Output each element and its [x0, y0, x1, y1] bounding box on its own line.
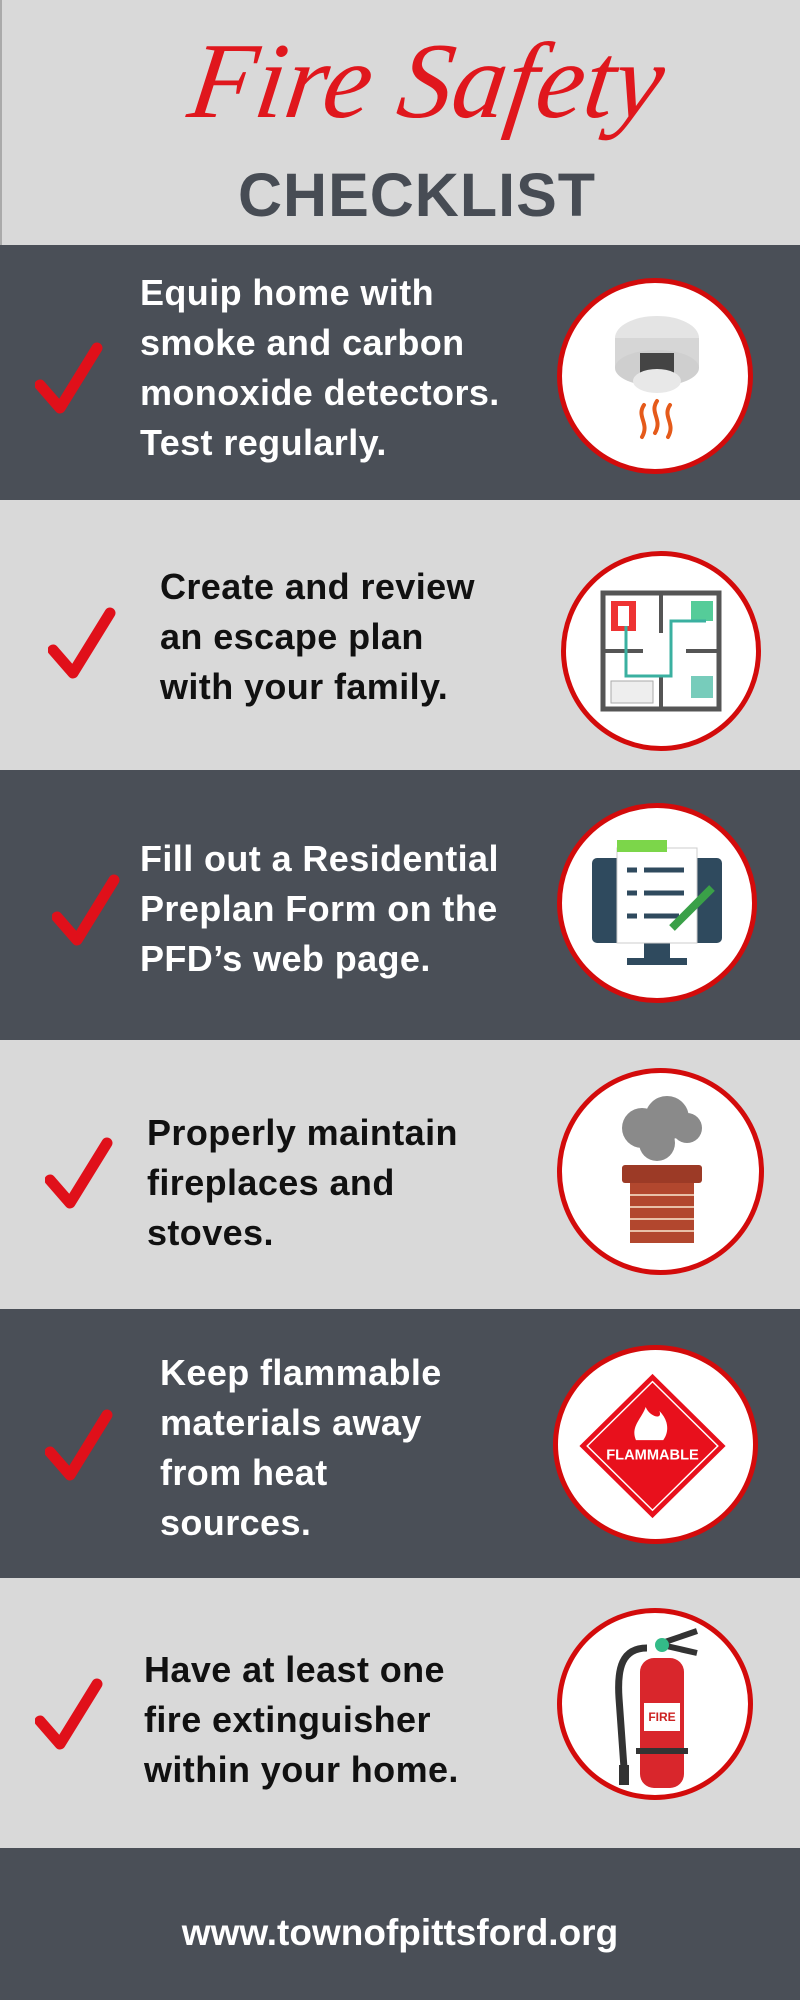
- check icon: [52, 874, 120, 946]
- icon: flammable sign: FLAMMABLE: [606, 1448, 699, 1464]
- row 3: [0, 770, 800, 1040]
- subtitle: CHECKLIST: CHECKLIST: [238, 161, 596, 229]
- row 2: [0, 500, 800, 770]
- footer url: www.townofpittsford.org: [182, 1912, 618, 1953]
- text: detectors: Equip home with: [140, 272, 434, 313]
- text: flammables: sources.: [160, 1502, 311, 1543]
- title: Fire Safety: Fire Safety: [182, 22, 672, 141]
- text: detectors: [140, 272, 500, 463]
- text: fireplaces: Properly maintain: [147, 1112, 458, 1153]
- text: flammables: [160, 1352, 442, 1543]
- text: flammables: materials away: [160, 1402, 422, 1443]
- text: extinguisher: fire extinguisher: [144, 1699, 431, 1740]
- icon: floor plan: [561, 551, 761, 751]
- check icon: [35, 1678, 102, 1750]
- row 4: [0, 1040, 800, 1309]
- icon: smoke detector: [557, 278, 753, 474]
- text: escape plan: an escape plan: [160, 616, 424, 657]
- icon: computer form: [557, 803, 757, 1003]
- icon: extinguisher: FIRE: [648, 1710, 676, 1724]
- check icon: [35, 342, 102, 414]
- header: [0, 0, 800, 245]
- text: escape plan: with your family.: [160, 666, 448, 707]
- text: preplan form: Fill out a Residential: [140, 838, 499, 879]
- text: detectors: Test regularly.: [140, 422, 387, 463]
- icon: extinguisher: [557, 1608, 753, 1800]
- row 5: [0, 1309, 800, 1578]
- text: preplan form: Preplan Form on the: [140, 888, 498, 929]
- text: fireplaces: stoves.: [147, 1212, 274, 1253]
- text: flammables: from heat: [160, 1452, 328, 1493]
- text: extinguisher: Have at least one: [144, 1649, 445, 1690]
- text: fireplaces: fireplaces and: [147, 1162, 395, 1203]
- text: escape plan: [160, 566, 475, 707]
- row 6: [0, 1578, 800, 1848]
- text: detectors: smoke and carbon: [140, 322, 464, 363]
- text: extinguisher: within your home.: [144, 1749, 459, 1790]
- icon: chimney: [557, 1068, 764, 1275]
- footer: [0, 1848, 800, 2000]
- check icon: [45, 1410, 112, 1480]
- text: detectors: monoxide detectors.: [140, 372, 500, 413]
- check icon: [45, 1138, 112, 1208]
- icon: flammable sign: [553, 1345, 758, 1544]
- row 1: [0, 245, 800, 500]
- text: escape plan: Create and review: [160, 566, 475, 607]
- text: extinguisher: [144, 1649, 459, 1790]
- text: flammables: Keep flammable: [160, 1352, 442, 1393]
- text: preplan form: PFD’s web page.: [140, 938, 431, 979]
- text: fireplaces: [147, 1112, 458, 1253]
- text: preplan form: [140, 838, 499, 979]
- check icon: [48, 608, 116, 678]
